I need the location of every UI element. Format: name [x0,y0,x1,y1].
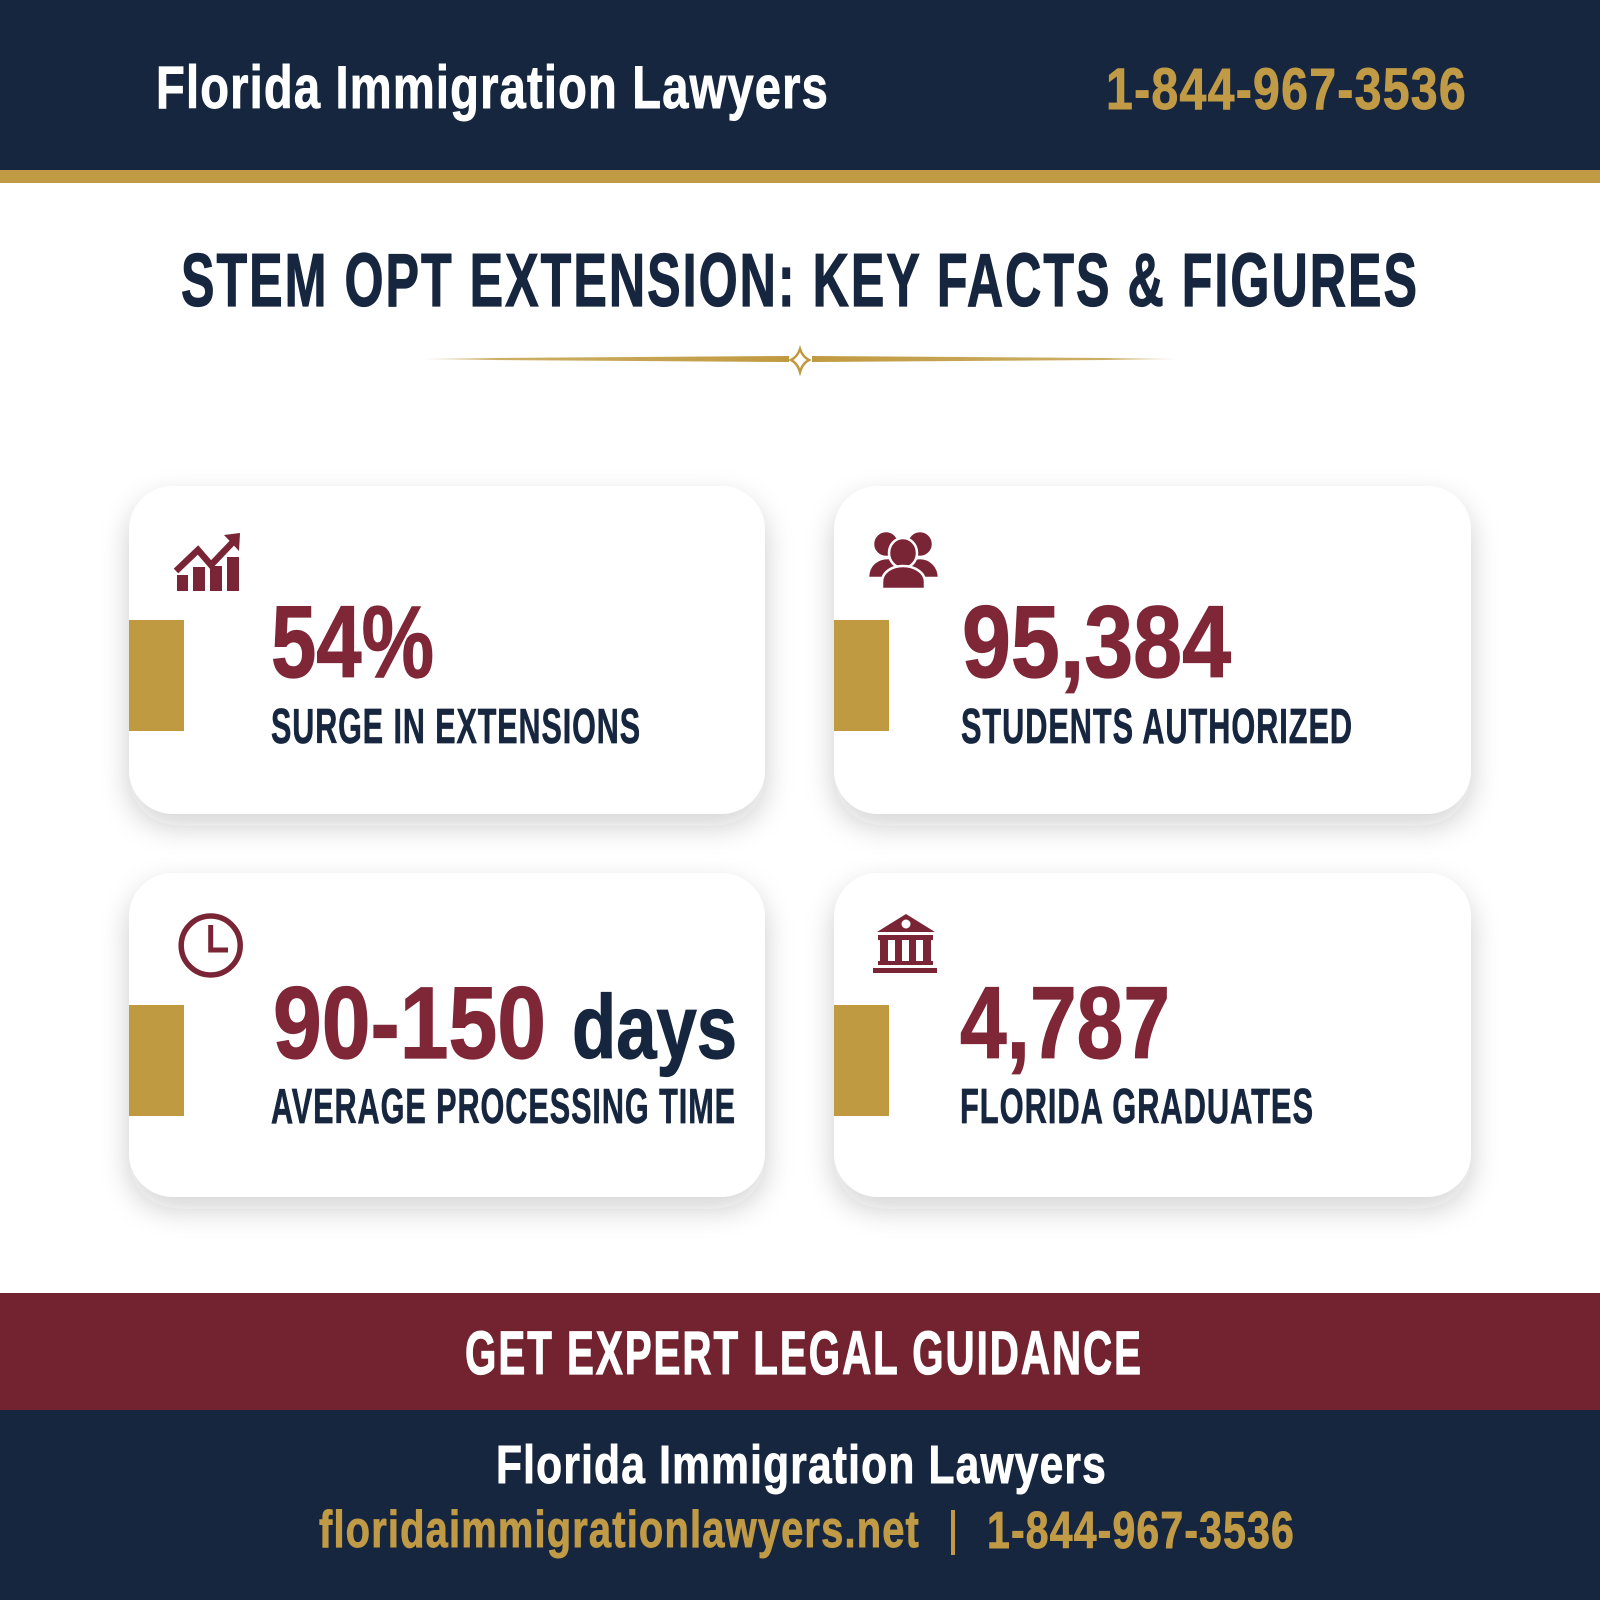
gold accent bar [129,620,184,731]
gold accent bar [834,620,889,731]
title divider with diamond [424,349,1176,372]
stat value: 95,384 [962,585,1231,699]
footer phone number: 1-844-967-3536 [987,1502,1295,1560]
panel: processing time [129,873,765,1197]
stat unit: days [572,978,737,1078]
call to action text: GET EXPERT LEGAL GUIDANCE [465,1319,1143,1387]
panel: florida graduates [834,873,1471,1197]
panel: students authorized [834,486,1471,814]
header phone number: 1-844-967-3536 [1106,57,1467,122]
footer separator [951,1510,955,1555]
footer website: floridaimmigrationlawyers.net [319,1501,920,1559]
stat value: 90-150 [273,966,546,1080]
stat value: 54% [271,585,434,699]
footer band [0,1410,1600,1600]
stat label: AVERAGE PROCESSING TIME [271,1080,736,1134]
gold accent bar [129,1005,184,1116]
stat label: FLORIDA GRADUATES [960,1080,1314,1134]
stat label: SURGE IN EXTENSIONS [271,700,641,754]
panel: surge in extensions [129,486,765,814]
call to action band [0,1293,1600,1410]
icon: rising chart [176,533,240,591]
footer firm name: Florida Immigration Lawyers [496,1435,1107,1495]
icon: clock [181,916,240,975]
stat value: 4,787 [960,966,1170,1080]
icon: institution building [873,914,937,973]
header band [0,0,1600,183]
stat label: STUDENTS AUTHORIZED [961,700,1353,754]
header firm name: Florida Immigration Lawyers [156,54,829,121]
icon: group of people [868,531,939,589]
gold accent bar [834,1005,889,1116]
